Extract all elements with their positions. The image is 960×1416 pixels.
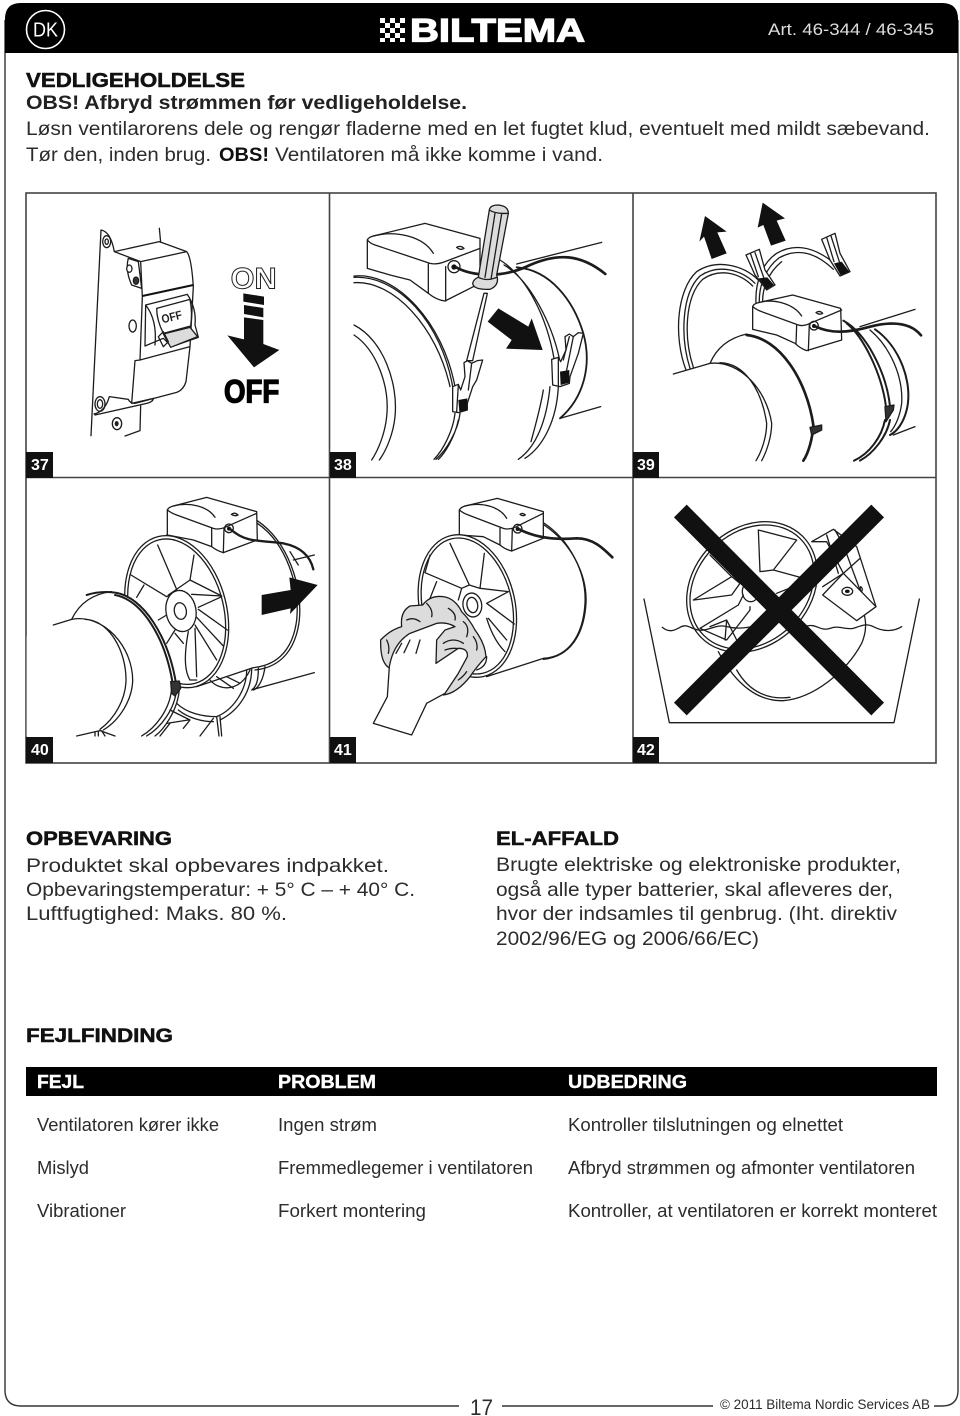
on off indicator: OFF [224,373,279,409]
fan ring and blades [405,525,530,687]
breaker drawing [91,228,198,436]
storage text block: OPBEVARING [26,829,172,850]
duct [634,309,915,462]
panel 42: do not immerse [644,495,919,723]
junction box [753,295,842,351]
e-waste text block: 2002/96/EG og 2006/66/EC) [496,928,759,950]
maintenance text block: OBS! [219,144,269,166]
badge 37 [26,452,53,478]
arrow [262,577,318,615]
cable [231,529,313,569]
panel 38: loosen clamp [354,205,605,460]
row 2: Mislyd [37,1158,89,1178]
badge 40: 40 [31,742,49,759]
table header [26,1067,937,1096]
water line [662,625,902,631]
row 2: Afbryd strømmen og afmonter ventilatoren [568,1158,915,1178]
badge 37: 37 [31,457,49,474]
row 1: Kontroller tilslutningen og elnettet [568,1115,843,1135]
row 1: Ventilatoren kører ikke [37,1115,219,1135]
junction box [167,497,257,553]
copyright: © 2011 Biltema Nordic Services AB [720,1397,930,1412]
badge 38 [330,452,356,478]
e-waste text block: også alle typer batterier, skal afleveres der, [496,879,893,901]
maintenance text block: VEDLIGEHOLDELSE [26,70,245,92]
row 2 [37,1158,915,1178]
row 1: Ingen strøm [278,1115,377,1135]
lower clamp [160,703,222,736]
row 3 [37,1201,937,1221]
badge 38: 38 [334,457,352,474]
row 2: Fremmedlegemer i ventilatoren [278,1158,533,1178]
article number: Art. 46-344 / 46-345 [768,20,934,39]
storage text block [26,829,415,925]
basin [644,599,919,723]
e-waste text block: hvor der indsamles til genbrug. (Iht. direktiv [496,903,897,925]
storage text block: Produktet skal opbevares indpakket. [26,855,389,877]
row 1 [37,1115,843,1135]
on off indicator: ON [231,263,277,296]
e-waste text block: EL-AFFALD [496,829,619,850]
troubleshooting table [26,1067,937,1221]
fan body [463,523,586,677]
row 3: Kontroller, at ventilatoren er korrekt monteret [568,1201,937,1221]
maintenance text block [26,70,930,166]
maintenance text block: Tør den, inden brug. [26,144,211,166]
table header: UDBEDRING [568,1072,687,1092]
header bar [5,3,958,53]
submerged fan [660,495,876,701]
cable [519,529,612,557]
cable [456,257,605,275]
maintenance text block: Ventilatoren må ikke komme i vand. [275,144,603,166]
logo [380,12,585,48]
screwdriver [467,205,508,361]
cable [816,324,921,335]
panel 40: remove fan [27,497,318,736]
badge 41 [330,737,356,763]
badge 42: 42 [637,742,655,759]
language badge [26,10,64,48]
badge 40 [26,737,53,763]
table header: PROBLEM [278,1072,376,1092]
breaker drawing: OFF [160,308,183,326]
panel 39: remove clamps [634,203,921,462]
prohibited cross [680,511,878,709]
fan body [167,521,314,720]
row 3: Forkert montering [278,1201,426,1221]
arrows [699,203,786,259]
table header: FEJL [37,1072,84,1092]
e-waste text block [496,829,901,950]
logo: BILTEMA [410,12,585,48]
storage text block: Luftfugtighed: Maks. 80 %. [26,903,287,925]
straps [679,233,850,370]
connecting duct [27,592,181,736]
badge 42 [633,737,659,763]
badge 39 [633,452,659,478]
maintenance text block: Løsn ventilarorens dele og rengør fladerne med en let fugtet klud, eventuelt med mildt sæbevand. [26,118,930,140]
badge 41: 41 [334,742,352,759]
on off indicator [224,263,279,409]
junction box [459,498,543,551]
panel 41: wipe with cloth [373,498,612,735]
storage text block: Opbevaringstemperatur: + 5° C – + 40° C. [26,879,415,901]
badge 39: 39 [637,457,655,474]
panel 37: switch off [91,228,279,436]
language badge: DK [33,20,59,42]
junction box [367,223,480,301]
row 3: Vibrationer [37,1201,126,1221]
maintenance text block: OBS! Afbryd strømmen før vedligeholdelse. [26,92,467,114]
e-waste text block: Brugte elektriske og elektroniske produkter, [496,854,901,876]
fan ring and blades [109,525,244,699]
cloth [381,596,486,695]
hand [373,623,467,735]
troubleshooting heading: FEJLFINDING [26,1026,173,1047]
duct and clamps [354,242,602,460]
arrow [488,308,543,350]
panel grid [26,193,936,763]
